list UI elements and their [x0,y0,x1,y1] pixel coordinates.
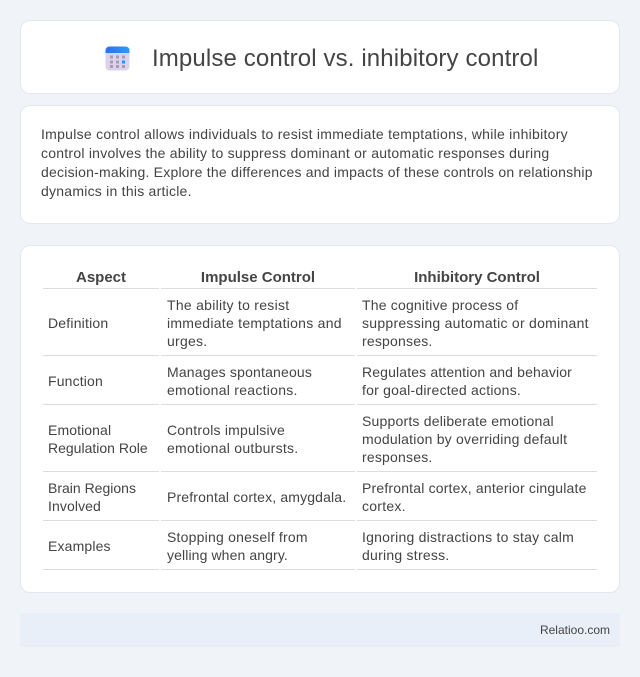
text: Ignoring distractions to stay calm [362,529,574,545]
panel: header [20,20,620,94]
table row: definition [43,297,597,356]
table row: brain regions involved [43,480,597,521]
text: Stopping oneself from [167,529,308,545]
text: responses. [362,449,432,465]
panel: comparison table [20,245,620,593]
text: Definition [48,315,108,331]
text: Controls impulsive [167,422,285,438]
text block: introduction: Impulse control allows individuals to resist immediate temptations, while inhibitory [41,126,568,142]
text: yelling when angry. [167,547,288,563]
text: Prefrontal cortex, amygdala. [167,489,346,505]
text: immediate temptations and [167,315,342,331]
text: suppressing automatic or dominant [362,315,589,331]
text: Regulates attention and behavior [362,364,572,380]
text block: introduction [41,126,593,199]
footer bar [20,613,620,647]
text: modulation by overriding default [362,431,567,447]
text: The cognitive process of [362,297,518,313]
footer text: Relatioo.com [540,623,610,637]
text: Examples [48,538,111,554]
table header [43,269,597,289]
text: Function [48,373,103,389]
text: responses. [362,333,432,349]
text: Prefrontal cortex, anterior cingulate [362,480,587,496]
text: Inhibitory Control [414,269,540,286]
text: cortex. [362,498,406,514]
text: Emotional [48,422,111,438]
text: during stress. [362,547,450,563]
table row: function [43,364,597,405]
text block: introduction: dynamics in this article. [41,183,192,199]
icon: calendar [106,46,130,70]
text: urges. [167,333,207,349]
text: Regulation Role [48,440,148,456]
text block: introduction: control involves the ability to suppress dominant or automatic responses during [41,145,549,161]
table row: examples [43,529,597,570]
text: Brain Regions [48,480,136,496]
text: emotional reactions. [167,382,298,398]
text: Involved [48,498,101,514]
text: for goal-directed actions. [362,382,521,398]
text: emotional outbursts. [167,440,298,456]
text: Manages spontaneous [167,364,312,380]
table row: emotional regulation role [43,413,597,472]
text: Impulse Control [201,269,315,286]
panel: introduction [20,105,620,224]
text block: introduction: decision-making. Explore the differences and impacts of these controls on relationship [41,164,593,180]
title: Impulse control vs. inhibitory control [152,45,538,72]
text: The ability to resist [167,297,289,313]
text: Aspect [76,269,126,286]
text: Supports deliberate emotional [362,413,554,429]
